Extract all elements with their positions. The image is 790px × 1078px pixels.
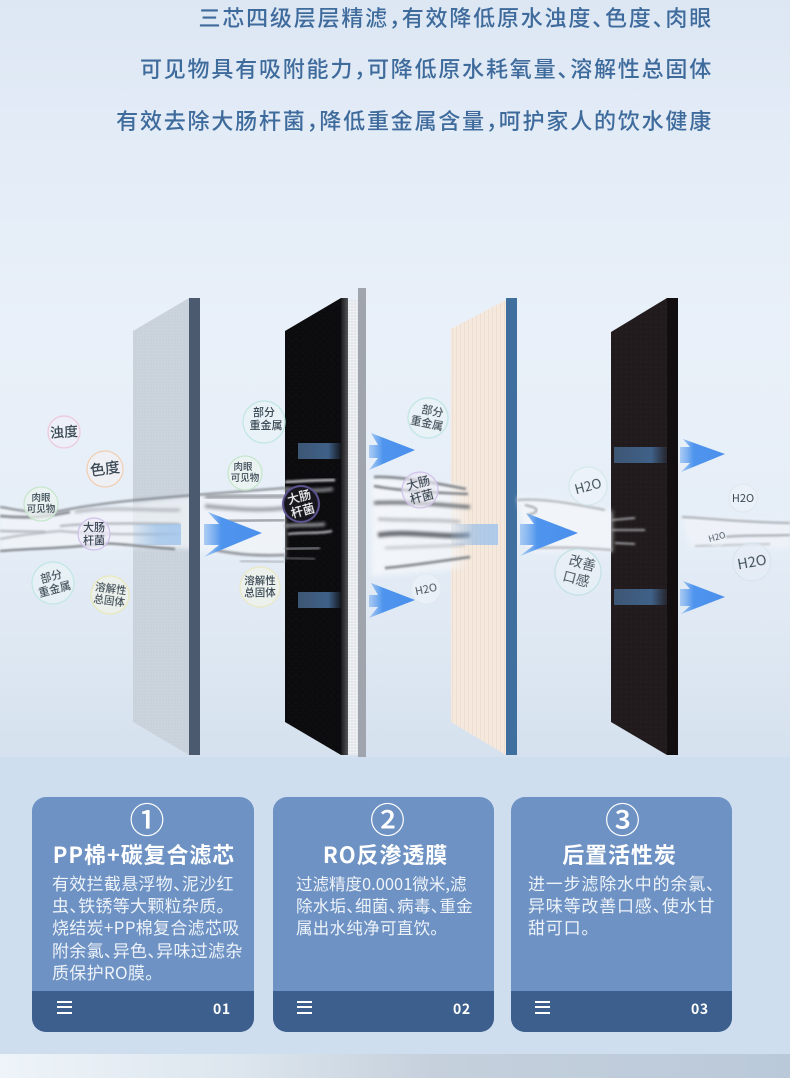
arrow: after filter 3: [520, 513, 578, 556]
card 1: PP cotton + carbon: [32, 797, 254, 1032]
card 3 description: 进一步滤除水中的余氯、: [528, 870, 715, 895]
bubble: visible matter: 肉眼: [31, 490, 51, 504]
card 1 description: 附余氯、异色、异味过滤杂: [52, 937, 243, 962]
card 1 title: PP棉+碳复合滤芯: [53, 838, 235, 870]
menu icon: [57, 1001, 72, 1014]
bubble: heavy metals: 重金属: [37, 577, 73, 601]
filtration diagram: [0, 288, 790, 757]
card 1 index: 01: [213, 999, 231, 1019]
bubble: turbidity: [48, 416, 80, 448]
light blue band on filter 1: [133, 524, 181, 545]
card 3 description: [528, 870, 715, 939]
filter 2: carbon panel: [285, 288, 366, 759]
bubble: E. coli, stage 3: 杆菌: [408, 485, 435, 508]
arrow: after filter 4 lower: [680, 581, 725, 614]
card 3 title: 后置活性炭: [562, 838, 677, 870]
card 1 description: 有效拦截悬浮物、泥沙红: [52, 870, 234, 895]
menu icon: [297, 1001, 312, 1014]
card 2 description: 除水垢、细菌、病毒、重金: [296, 893, 473, 917]
arrow: after filter 2 lower: [369, 583, 415, 618]
filter 4: activated carbon panel: [611, 298, 678, 755]
bubble: H2O outflow small: H2O: [707, 529, 727, 545]
card 2 title: RO反渗透膜: [323, 838, 448, 870]
bubble: E. coli, stage 3: 大肠: [404, 471, 432, 494]
bubble: H2O outflow large: H2O: [736, 549, 768, 574]
water stream: outgoing: [682, 516, 790, 548]
bubble: heavy metals, stage 2: [243, 401, 285, 443]
bubble: E. coli on carbon: [279, 482, 323, 526]
card 3: post activated carbon: [511, 797, 732, 1032]
bubble: H2O outflow large: [730, 540, 774, 584]
card 2 index: 02: [453, 999, 471, 1019]
water stream: incoming through filter 1: [0, 488, 285, 562]
bubble: dissolved solids, stage 2: 总固体: [244, 585, 276, 600]
card 3 description: 异味等改善口感、使水甘: [528, 892, 715, 917]
card 2 description: 过滤精度0.0001微米,滤: [296, 871, 466, 895]
heading line 3: 有效去除大肠杆菌，降低重金属含量，呵护家人的饮水健康: [116, 104, 713, 136]
filter 1 edge over water: [189, 470, 200, 570]
bubble: heavy metals, stage 2: 重金属: [250, 417, 282, 433]
arrow: after filter 1: [204, 512, 262, 557]
bubble: heavy metals, stage 3: 部分: [420, 401, 445, 421]
bottom strip: [0, 1054, 790, 1078]
bubble: heavy metals: 部分: [38, 566, 64, 587]
bubble: E. coli: [78, 518, 110, 550]
heading text block: [116, 1, 713, 136]
card 3 description: 甜可口。: [528, 914, 591, 939]
bubble: visible matter: [24, 487, 58, 521]
card 1 description: 质保护RO膜。: [52, 959, 154, 984]
bubble: dissolved solids: [89, 574, 131, 616]
light blue band on filter 3: [451, 524, 498, 545]
arrow: after filter 4 upper: [680, 439, 725, 472]
bubble: E. coli: 大肠: [83, 519, 105, 535]
bubble: turbidity: 浊度: [49, 421, 79, 443]
card 2 description: [296, 871, 473, 939]
bubble: H2O outflow top: [729, 484, 757, 512]
bubble: visible matter, stage 2: [228, 456, 262, 490]
bubble: E. coli, stage 3: [398, 468, 442, 512]
heading line 2: 可见物具有吸附能力，可降低原水耗氧量、溶解性总固体: [140, 52, 713, 84]
bubble: heavy metals, stage 3: [404, 394, 452, 442]
card 3 index: 03: [691, 999, 709, 1019]
bubble: dissolved solids, stage 2: [240, 567, 280, 607]
bubble: H2O before filter 4: [565, 463, 611, 509]
bubble: E. coli on carbon: 杆菌: [289, 499, 316, 522]
background: [0, 0, 790, 757]
water stream: between filter 2 and 3: [372, 477, 470, 576]
bubble: visible matter, stage 2: 可见物: [231, 470, 260, 484]
bubble: improved taste: 口感: [561, 565, 592, 591]
bubble: heavy metals, stage 3: 重金属: [409, 412, 445, 434]
arrow: after filter 2 upper: [369, 433, 415, 470]
bubble: heavy metals, stage 2: 部分: [253, 404, 275, 420]
card 3 footer: [511, 991, 732, 1032]
bubble: H2O, stage 3: [408, 571, 444, 607]
bubble: visible matter: 可见物: [27, 501, 56, 515]
card 2 footer: [273, 991, 494, 1032]
bubble: improved taste: [550, 544, 606, 600]
bubble: H2O outflow top: H2O: [732, 490, 754, 506]
bubble: improved taste: 改善: [567, 549, 598, 575]
bubble: visible matter, stage 2: 肉眼: [233, 459, 253, 473]
water stream: between filter 3 and 4: [517, 497, 645, 552]
menu icon: [535, 1001, 550, 1014]
bubble: H2O, stage 3: H2O: [413, 579, 439, 599]
bubble: color: 色度: [89, 456, 121, 481]
bubble: H2O outflow small: [705, 525, 729, 549]
card 1 description: [52, 870, 243, 984]
bubble: heavy metals: [27, 557, 79, 609]
card 1 description: 虫、铁锈等大颗粒杂质。: [52, 892, 225, 917]
water stream: on carbon panel: [285, 480, 335, 559]
card 2: RO membrane: [273, 797, 494, 1032]
bubble: E. coli: 杆菌: [83, 532, 105, 548]
card 1 description: 烧结炭+PP棉复合滤芯吸: [52, 914, 240, 939]
bubble: E. coli on carbon: 大肠: [285, 485, 313, 508]
filter 1: PP cotton panel: [133, 298, 200, 755]
card 1 footer: [32, 991, 254, 1032]
bubble: dissolved solids, stage 2: 溶解性: [244, 573, 276, 588]
bubble: H2O before filter 4: H2O: [572, 472, 604, 498]
filter 3: RO membrane panel: [451, 298, 517, 755]
heading line 1: 三芯四级层层精滤，有效降低原水浊度、色度、肉眼: [199, 1, 713, 33]
bubble: color: [87, 451, 123, 487]
card 2 description: 属出水纯净可直饮。: [296, 915, 439, 939]
bubble: dissolved solids: 溶解性: [94, 579, 128, 598]
bubble: dissolved solids: 总固体: [93, 591, 126, 610]
